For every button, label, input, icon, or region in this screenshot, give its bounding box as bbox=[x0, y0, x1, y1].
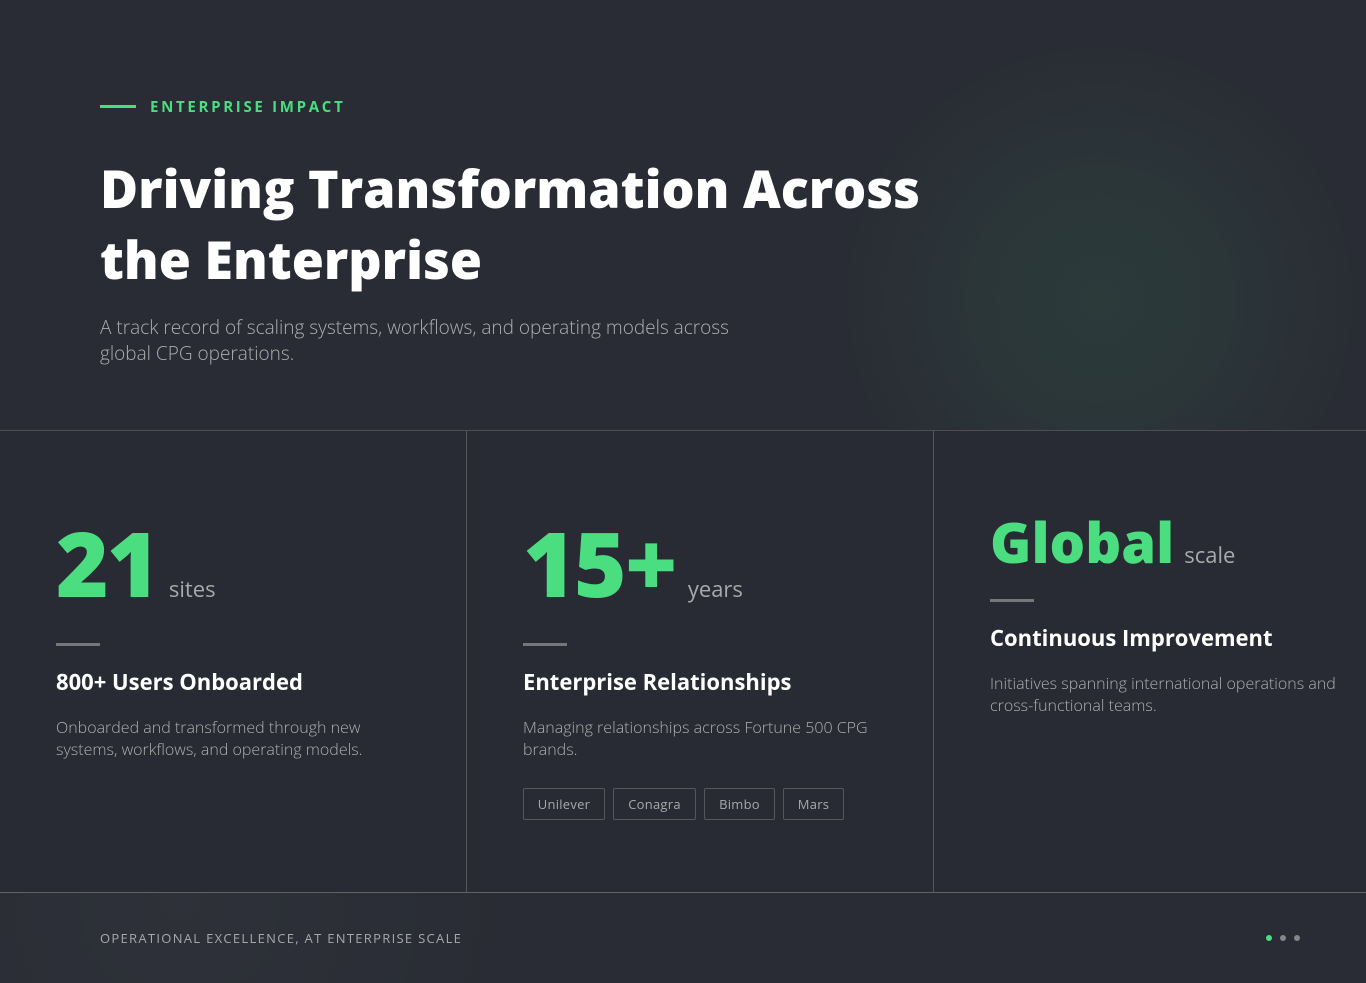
heading: Enterprise Relationships bbox=[523, 667, 791, 697]
divider bbox=[990, 599, 1034, 602]
stat Global scale: Global scale bbox=[990, 504, 1235, 580]
active dot bbox=[1266, 935, 1272, 941]
stat 15+ years: 15+ years bbox=[523, 502, 743, 624]
tag: Conagra: Conagra bbox=[628, 795, 681, 813]
tag: Mars bbox=[783, 788, 844, 820]
title: the Enterprise bbox=[100, 224, 482, 295]
tag: Unilever bbox=[523, 788, 605, 820]
tag: Bimbo bbox=[704, 788, 775, 820]
description: systems, workflows, and operating models. bbox=[56, 738, 362, 760]
description: Managing relationships across Fortune 500 CPG bbox=[523, 716, 868, 738]
description bbox=[523, 716, 868, 760]
tag: Unilever: Unilever bbox=[538, 795, 590, 813]
heading: 800+ Users Onboarded bbox=[56, 667, 303, 697]
footer glow bbox=[0, 893, 1366, 983]
heading: Continuous Improvement bbox=[990, 623, 1273, 653]
title bbox=[100, 153, 920, 295]
dot 2 bbox=[1280, 935, 1286, 941]
description: Onboarded and transformed through new bbox=[56, 716, 360, 738]
subtitle: global CPG operations. bbox=[100, 340, 294, 366]
footer bbox=[0, 892, 1366, 983]
description bbox=[56, 716, 362, 760]
panel: sites bbox=[0, 431, 467, 893]
eyebrow rule bbox=[100, 105, 136, 108]
panel: years bbox=[467, 431, 934, 893]
subtitle: A track record of scaling systems, workflows, and operating models across bbox=[100, 314, 729, 340]
tag: Bimbo: Bimbo bbox=[719, 795, 760, 813]
description: Initiatives spanning international operations and bbox=[990, 672, 1336, 694]
description: brands. bbox=[523, 738, 577, 760]
divider bbox=[523, 643, 567, 646]
tag: Mars: Mars bbox=[798, 795, 829, 813]
pagination dots bbox=[1266, 935, 1300, 941]
description: cross-functional teams. bbox=[990, 694, 1157, 716]
description bbox=[990, 672, 1336, 716]
panel: global bbox=[990, 504, 1336, 716]
background glow bbox=[0, 0, 1366, 430]
stat 21 sites: 21 sites bbox=[56, 502, 216, 624]
tag: Conagra bbox=[613, 788, 696, 820]
tagline: OPERATIONAL EXCELLENCE, AT ENTERPRISE SCALE bbox=[100, 929, 462, 947]
dot 3 bbox=[1294, 935, 1300, 941]
divider bbox=[56, 643, 100, 646]
brand tags bbox=[523, 788, 844, 820]
eyebrow label: ENTERPRISE IMPACT bbox=[150, 97, 345, 117]
subtitle bbox=[100, 314, 729, 366]
header bbox=[0, 0, 1366, 431]
title: Driving Transformation Across bbox=[100, 153, 920, 224]
